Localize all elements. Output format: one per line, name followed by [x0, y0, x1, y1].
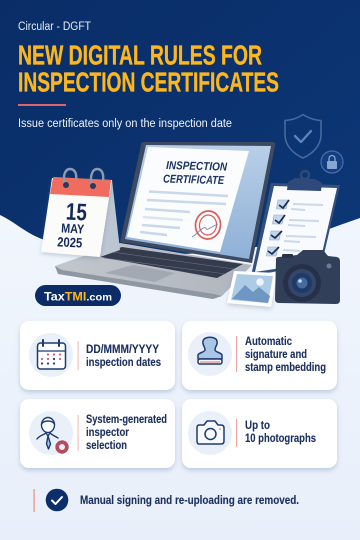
certificate page: CERTIFICATE — [163, 174, 224, 187]
icon: inspector with gear — [37, 418, 68, 452]
label: stamp embedding — [245, 362, 326, 374]
callout: manual steps removed: Manual signing and re-uploading are removed. — [80, 493, 299, 507]
calendar date: 15 — [65, 198, 88, 227]
logo pill: TaxTMI.com: TaxTMI.com — [44, 290, 112, 304]
panel: photographs — [182, 399, 337, 468]
calendar date: 2025 — [57, 234, 83, 251]
label: Up to — [245, 420, 270, 432]
eyebrow: Circular - DGFT: Circular - DGFT — [18, 21, 91, 33]
laptop lid — [120, 142, 275, 263]
label: signature and — [245, 349, 307, 361]
calendar date: MAY — [61, 220, 85, 237]
logo pill: TaxTMI.com — [35, 285, 121, 306]
laptop base — [55, 243, 252, 299]
red stamp — [192, 209, 222, 241]
illustration: laptop — [55, 142, 275, 299]
icon: camera outline — [197, 421, 224, 444]
label — [86, 344, 161, 369]
panel: signature and stamp — [182, 321, 337, 390]
label: selection — [86, 440, 127, 452]
title — [18, 40, 279, 98]
label: inspector — [86, 427, 129, 439]
icon: lock — [321, 151, 343, 173]
calendar date — [57, 198, 88, 251]
illustration: clipboard — [251, 171, 340, 276]
illustration: photo print — [227, 271, 277, 307]
label: inspection dates — [86, 357, 161, 369]
subtitle: Issue certificates only on the inspection date — [18, 118, 232, 130]
label — [245, 336, 326, 374]
icon: check badge — [46, 489, 68, 511]
label: 10 photographs — [245, 433, 316, 445]
illustration: camera — [275, 250, 340, 304]
illustration: desk calendar — [41, 169, 120, 257]
label — [245, 420, 316, 445]
certificate page — [127, 147, 249, 252]
label: System-generated — [86, 414, 167, 426]
label — [86, 414, 167, 452]
header background — [0, 0, 360, 300]
icon: calendar — [38, 340, 66, 369]
label: Automatic — [245, 336, 292, 348]
panel: inspection dates — [20, 321, 175, 390]
certificate page: INSPECTION — [166, 160, 228, 174]
label: DD/MMM/YYYY — [86, 344, 159, 356]
panel: inspector selection — [20, 399, 175, 468]
title: NEW DIGITAL RULES FOR — [18, 40, 262, 70]
callout: manual steps removed — [34, 489, 299, 512]
icon: shield — [285, 114, 321, 158]
light lower background — [0, 215, 360, 540]
icon: stamp — [198, 337, 222, 364]
red rule — [18, 104, 66, 106]
